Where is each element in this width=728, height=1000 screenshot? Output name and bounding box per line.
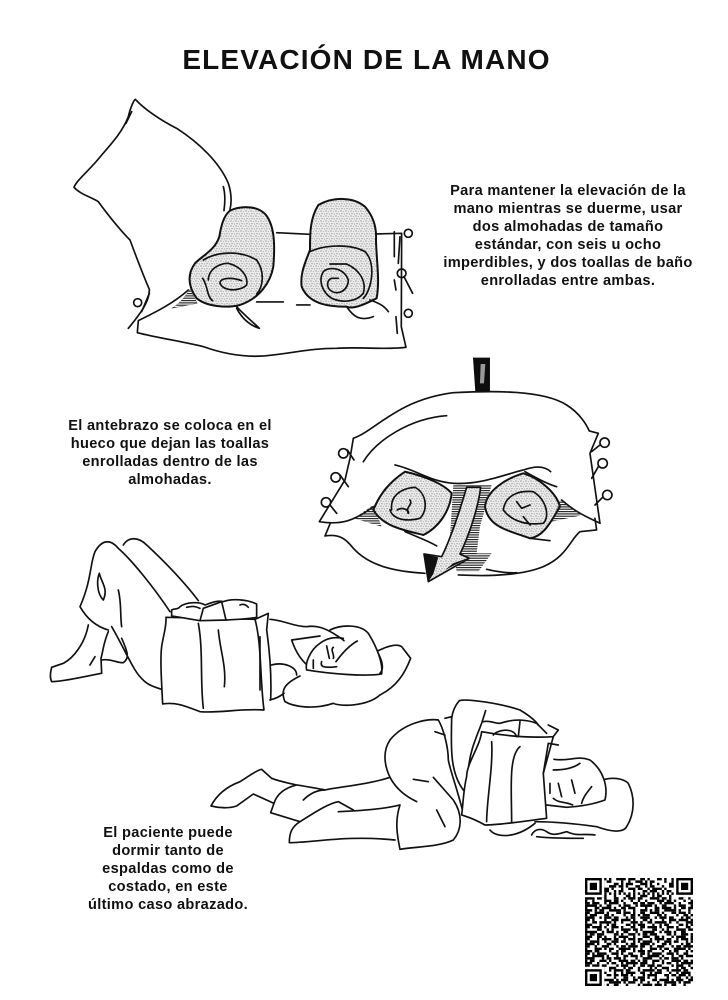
- title: ELEVACIÓN DE LA MANO: [182, 44, 551, 75]
- illustration: patient sleeping on back: [50, 539, 411, 712]
- text block: forearm placement: hueco que dejan las toallas: [71, 436, 269, 452]
- text block: sleeping positions: dormir tanto de: [112, 843, 224, 859]
- text block: how to keep the hand elevated: mano mientras se duerme, usar: [453, 201, 683, 217]
- text block: forearm placement: almohadas.: [128, 472, 212, 488]
- diagonal arrow: [424, 487, 481, 582]
- hip: [385, 720, 463, 813]
- text block: sleeping positions: costado, en este: [108, 879, 228, 895]
- illustration: pillows seen from the front with forearm arrow: [319, 392, 612, 582]
- left towel roll: [190, 207, 274, 307]
- left towel: [373, 472, 452, 535]
- text block: forearm placement: [68, 418, 272, 488]
- back pillow: [74, 99, 231, 328]
- illustration: pillows with rolled towels: [74, 99, 413, 356]
- text block: sleeping positions: espaldas como de: [102, 861, 234, 877]
- arm hugging pillow: [445, 700, 538, 805]
- safety pins right: [397, 229, 413, 317]
- text block: how to keep the hand elevated: [443, 183, 693, 289]
- safety pin left: [134, 299, 142, 307]
- right towel: [485, 473, 560, 538]
- text block: how to keep the hand elevated: Para mantener la elevación de la: [450, 183, 686, 199]
- text block: sleeping positions: [88, 825, 248, 913]
- pillow on chest: [161, 617, 264, 712]
- pillow: [462, 732, 553, 825]
- text block: how to keep the hand elevated: estándar, con seis u ocho: [475, 237, 661, 253]
- head: [306, 626, 382, 675]
- text block: sleeping positions: El paciente puede: [103, 825, 233, 841]
- rear leg and foot: [211, 769, 390, 822]
- signature: [532, 829, 595, 838]
- arrow shaft top: [473, 358, 490, 392]
- arrow: forearm entering opening: [473, 358, 490, 392]
- legs: [50, 539, 198, 689]
- text block: sleeping positions: último caso abrazado.: [88, 897, 248, 913]
- front leg and foot: [289, 777, 460, 849]
- head pillow: [283, 645, 411, 707]
- text block: how to keep the hand elevated: dos almohadas de tamaño: [473, 219, 663, 235]
- towel rolls: [172, 600, 257, 621]
- towels: [483, 720, 547, 737]
- right pins: [592, 438, 612, 505]
- head: [547, 758, 606, 807]
- text block: how to keep the hand elevated: enrolladas entre ambas.: [481, 273, 655, 289]
- bottom pillow: [325, 518, 597, 576]
- front pillow: [137, 233, 406, 356]
- head pillow: [490, 778, 633, 836]
- torso and arm: [270, 619, 344, 700]
- left pins: [321, 449, 354, 513]
- top pillow: [319, 392, 600, 523]
- finder patterns: [585, 878, 693, 986]
- text block: forearm placement: enrolladas dentro de las: [82, 454, 258, 470]
- text block: how to keep the hand elevated: imperdibles, y dos toallas de baño: [443, 255, 693, 271]
- QR code: [585, 878, 693, 986]
- illustration: patient sleeping on side: [211, 700, 633, 849]
- text block: forearm placement: El antebrazo se coloca en el: [68, 418, 272, 434]
- right towel roll: [301, 199, 378, 308]
- hatching: [354, 500, 583, 527]
